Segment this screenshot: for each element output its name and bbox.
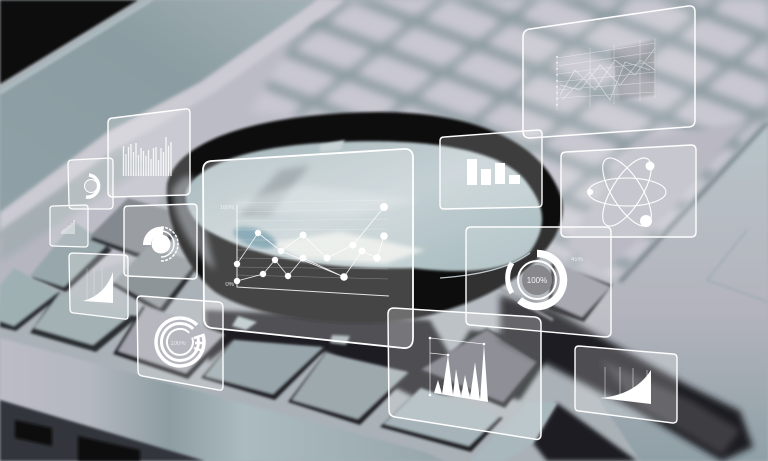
grey band under the edge: [0, 148, 150, 262]
lens inner wall: [172, 176, 215, 270]
large lavender key: [565, 122, 745, 275]
magnifier handle: [500, 295, 753, 461]
ports: [15, 420, 52, 446]
handle shadow: [533, 403, 637, 461]
panel: concentric ring chart: [137, 296, 223, 390]
gap under magnifier: [205, 310, 470, 400]
magnifier lens: [186, 141, 542, 271]
panel: main line chart: [203, 149, 413, 348]
chrome collar: [490, 281, 553, 320]
magnifier rim: [167, 112, 563, 323]
front edge: [0, 338, 445, 461]
blurred key grid, upper right: [250, 0, 768, 282]
palm rest: [560, 118, 768, 461]
light diagonal edge: [0, 0, 345, 232]
lower keys: [0, 198, 612, 452]
panel: bar chart with four columns: [440, 130, 542, 209]
panel: growth curve: [575, 346, 677, 423]
zero label: 0%: [225, 282, 235, 288]
laptop deck, upper left: [0, 0, 318, 213]
panel: bar spectrum chart: [108, 109, 190, 197]
black corner: [0, 0, 138, 84]
panel: faint grid chart, top right: [523, 6, 695, 138]
lens edge glint: [440, 253, 530, 278]
center value: 100%: [527, 276, 547, 285]
dark underside: [0, 400, 205, 461]
series points: [234, 203, 388, 284]
series lines: [237, 207, 384, 264]
panel: spike area chart: [388, 308, 541, 439]
panel: white curve area: [69, 253, 128, 319]
keyboard dark edge: [620, 122, 768, 282]
axis labels: 100%: [220, 205, 234, 211]
grid lines: [237, 200, 388, 279]
trackpad edge: [707, 230, 768, 302]
panel: radial fan chart: [124, 204, 197, 279]
chrome highlights: [232, 316, 257, 330]
panel: small ring gauge: [68, 158, 113, 209]
label: 100%: [170, 341, 186, 347]
panel: tiny rising bars: [50, 205, 88, 247]
panel: atom diagram: [561, 145, 696, 237]
lavender deck area between edge and keys: [0, 0, 440, 300]
lens reflections: [240, 165, 310, 215]
panel: donut gauge: [466, 227, 611, 337]
pale edge line: [0, 0, 150, 92]
side label: 45%: [571, 257, 584, 263]
